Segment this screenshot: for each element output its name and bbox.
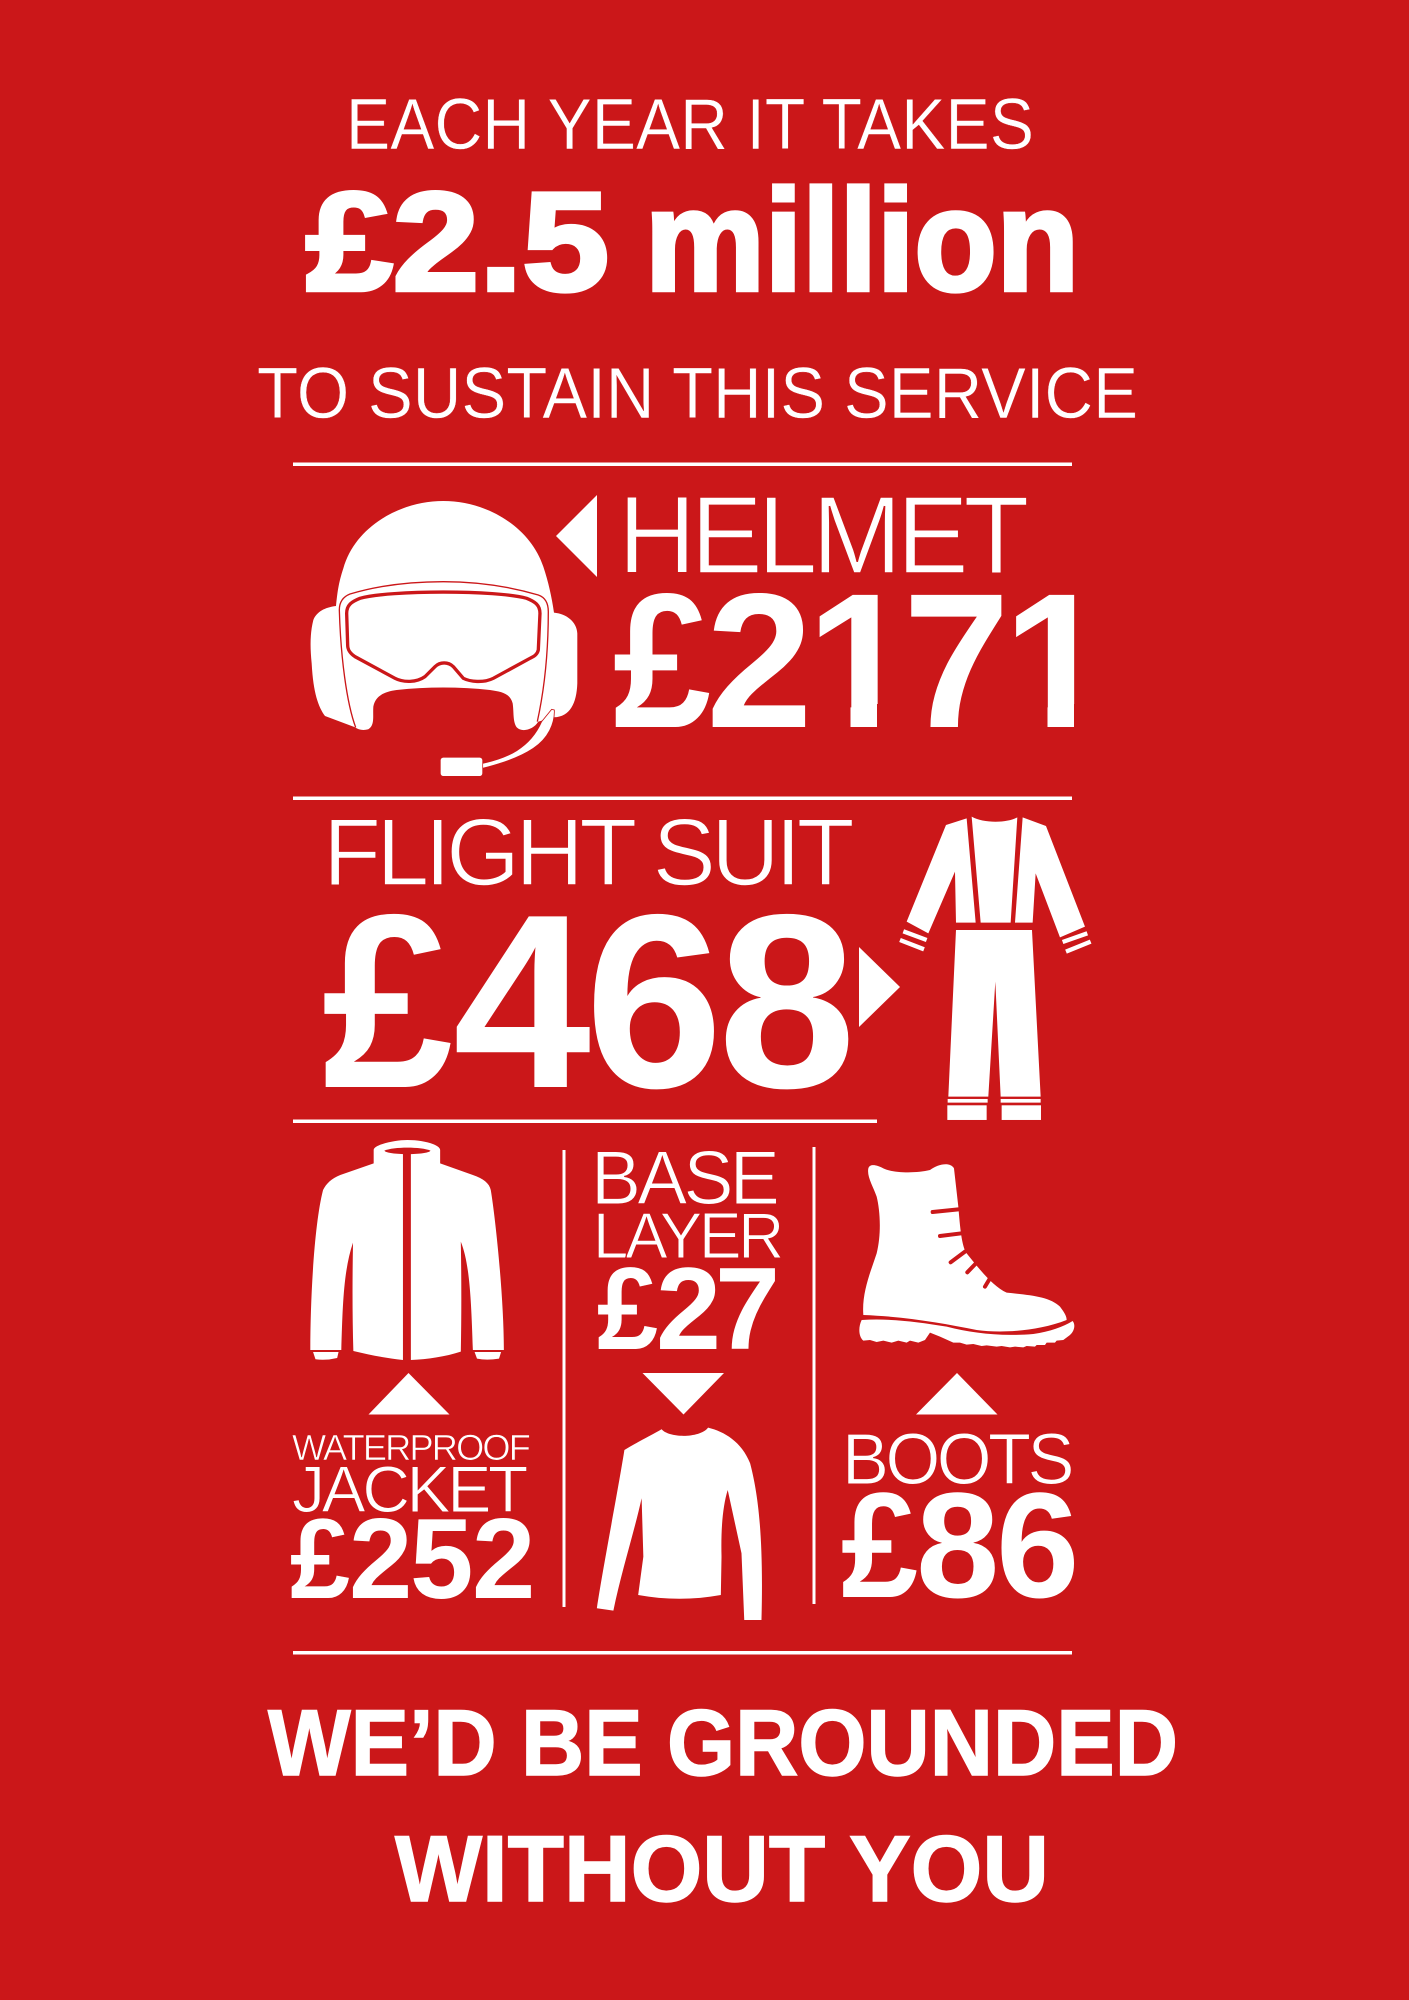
panel: base layer bbox=[591, 1136, 781, 1620]
closing line: without you: WITHOUT YOU bbox=[395, 1816, 1049, 1921]
panel: waterproof jacket bbox=[290, 1140, 535, 1623]
label: boots: BOOTS bbox=[842, 1420, 1072, 1500]
price: £2171: 2171 bbox=[706, 553, 1110, 768]
price: £468: 468 bbox=[453, 862, 856, 1140]
arrow: pointing left to helmet bbox=[556, 495, 597, 577]
panel: helmet bbox=[311, 474, 1110, 776]
price: £27: 27 bbox=[656, 1243, 780, 1374]
price: £86: £ bbox=[841, 1461, 918, 1629]
price: £252: 252 bbox=[349, 1496, 535, 1623]
heading line: to sustain this service: TO SUSTAIN THIS SERVICE bbox=[257, 354, 1138, 434]
label: layer: LAYER bbox=[593, 1199, 781, 1272]
price: £86 bbox=[841, 1461, 1079, 1629]
panel: boots bbox=[841, 1164, 1079, 1629]
price: £2171: £ bbox=[613, 553, 711, 768]
label: flight suit: FLIGHT SUIT bbox=[323, 799, 853, 906]
label: helmet: HELMET bbox=[618, 474, 1027, 597]
icon: flight helmet with visor and microphone bbox=[311, 501, 577, 776]
headline figure: £2.5 million bbox=[306, 160, 1079, 321]
price: £86: 86 bbox=[916, 1461, 1079, 1629]
arrow: pointing up to boot bbox=[916, 1373, 998, 1414]
header: funding statement bbox=[257, 85, 1138, 434]
label: base: BASE bbox=[591, 1136, 777, 1221]
icon: boot bbox=[859, 1164, 1074, 1347]
icon: waterproof jacket bbox=[310, 1140, 504, 1360]
price: £27 bbox=[597, 1243, 780, 1374]
arrow: pointing down to base layer bbox=[642, 1373, 724, 1414]
price: £27: £ bbox=[597, 1243, 658, 1374]
panel: flight suit bbox=[322, 799, 1091, 1140]
icon: base layer top bbox=[597, 1428, 762, 1620]
headline figure: £2.5 million: £2.5 bbox=[306, 163, 609, 320]
arrow: pointing right to flight suit bbox=[859, 947, 900, 1027]
price: £252: £ bbox=[290, 1496, 350, 1623]
arrow: pointing up to jacket bbox=[368, 1373, 450, 1414]
label: jacket: JACKET bbox=[292, 1452, 527, 1526]
price: £468: £ bbox=[322, 862, 453, 1140]
heading line: each year it takes: EACH YEAR IT TAKES bbox=[346, 85, 1034, 165]
closing message bbox=[268, 1690, 1178, 1921]
icon: flight suit bbox=[900, 817, 1091, 1120]
label: waterproof: WATERPROOF bbox=[292, 1427, 530, 1468]
headline figure: £2.5 million: million bbox=[645, 160, 1079, 321]
closing line: we'd be grounded: WE’D BE GROUNDED bbox=[268, 1690, 1178, 1795]
